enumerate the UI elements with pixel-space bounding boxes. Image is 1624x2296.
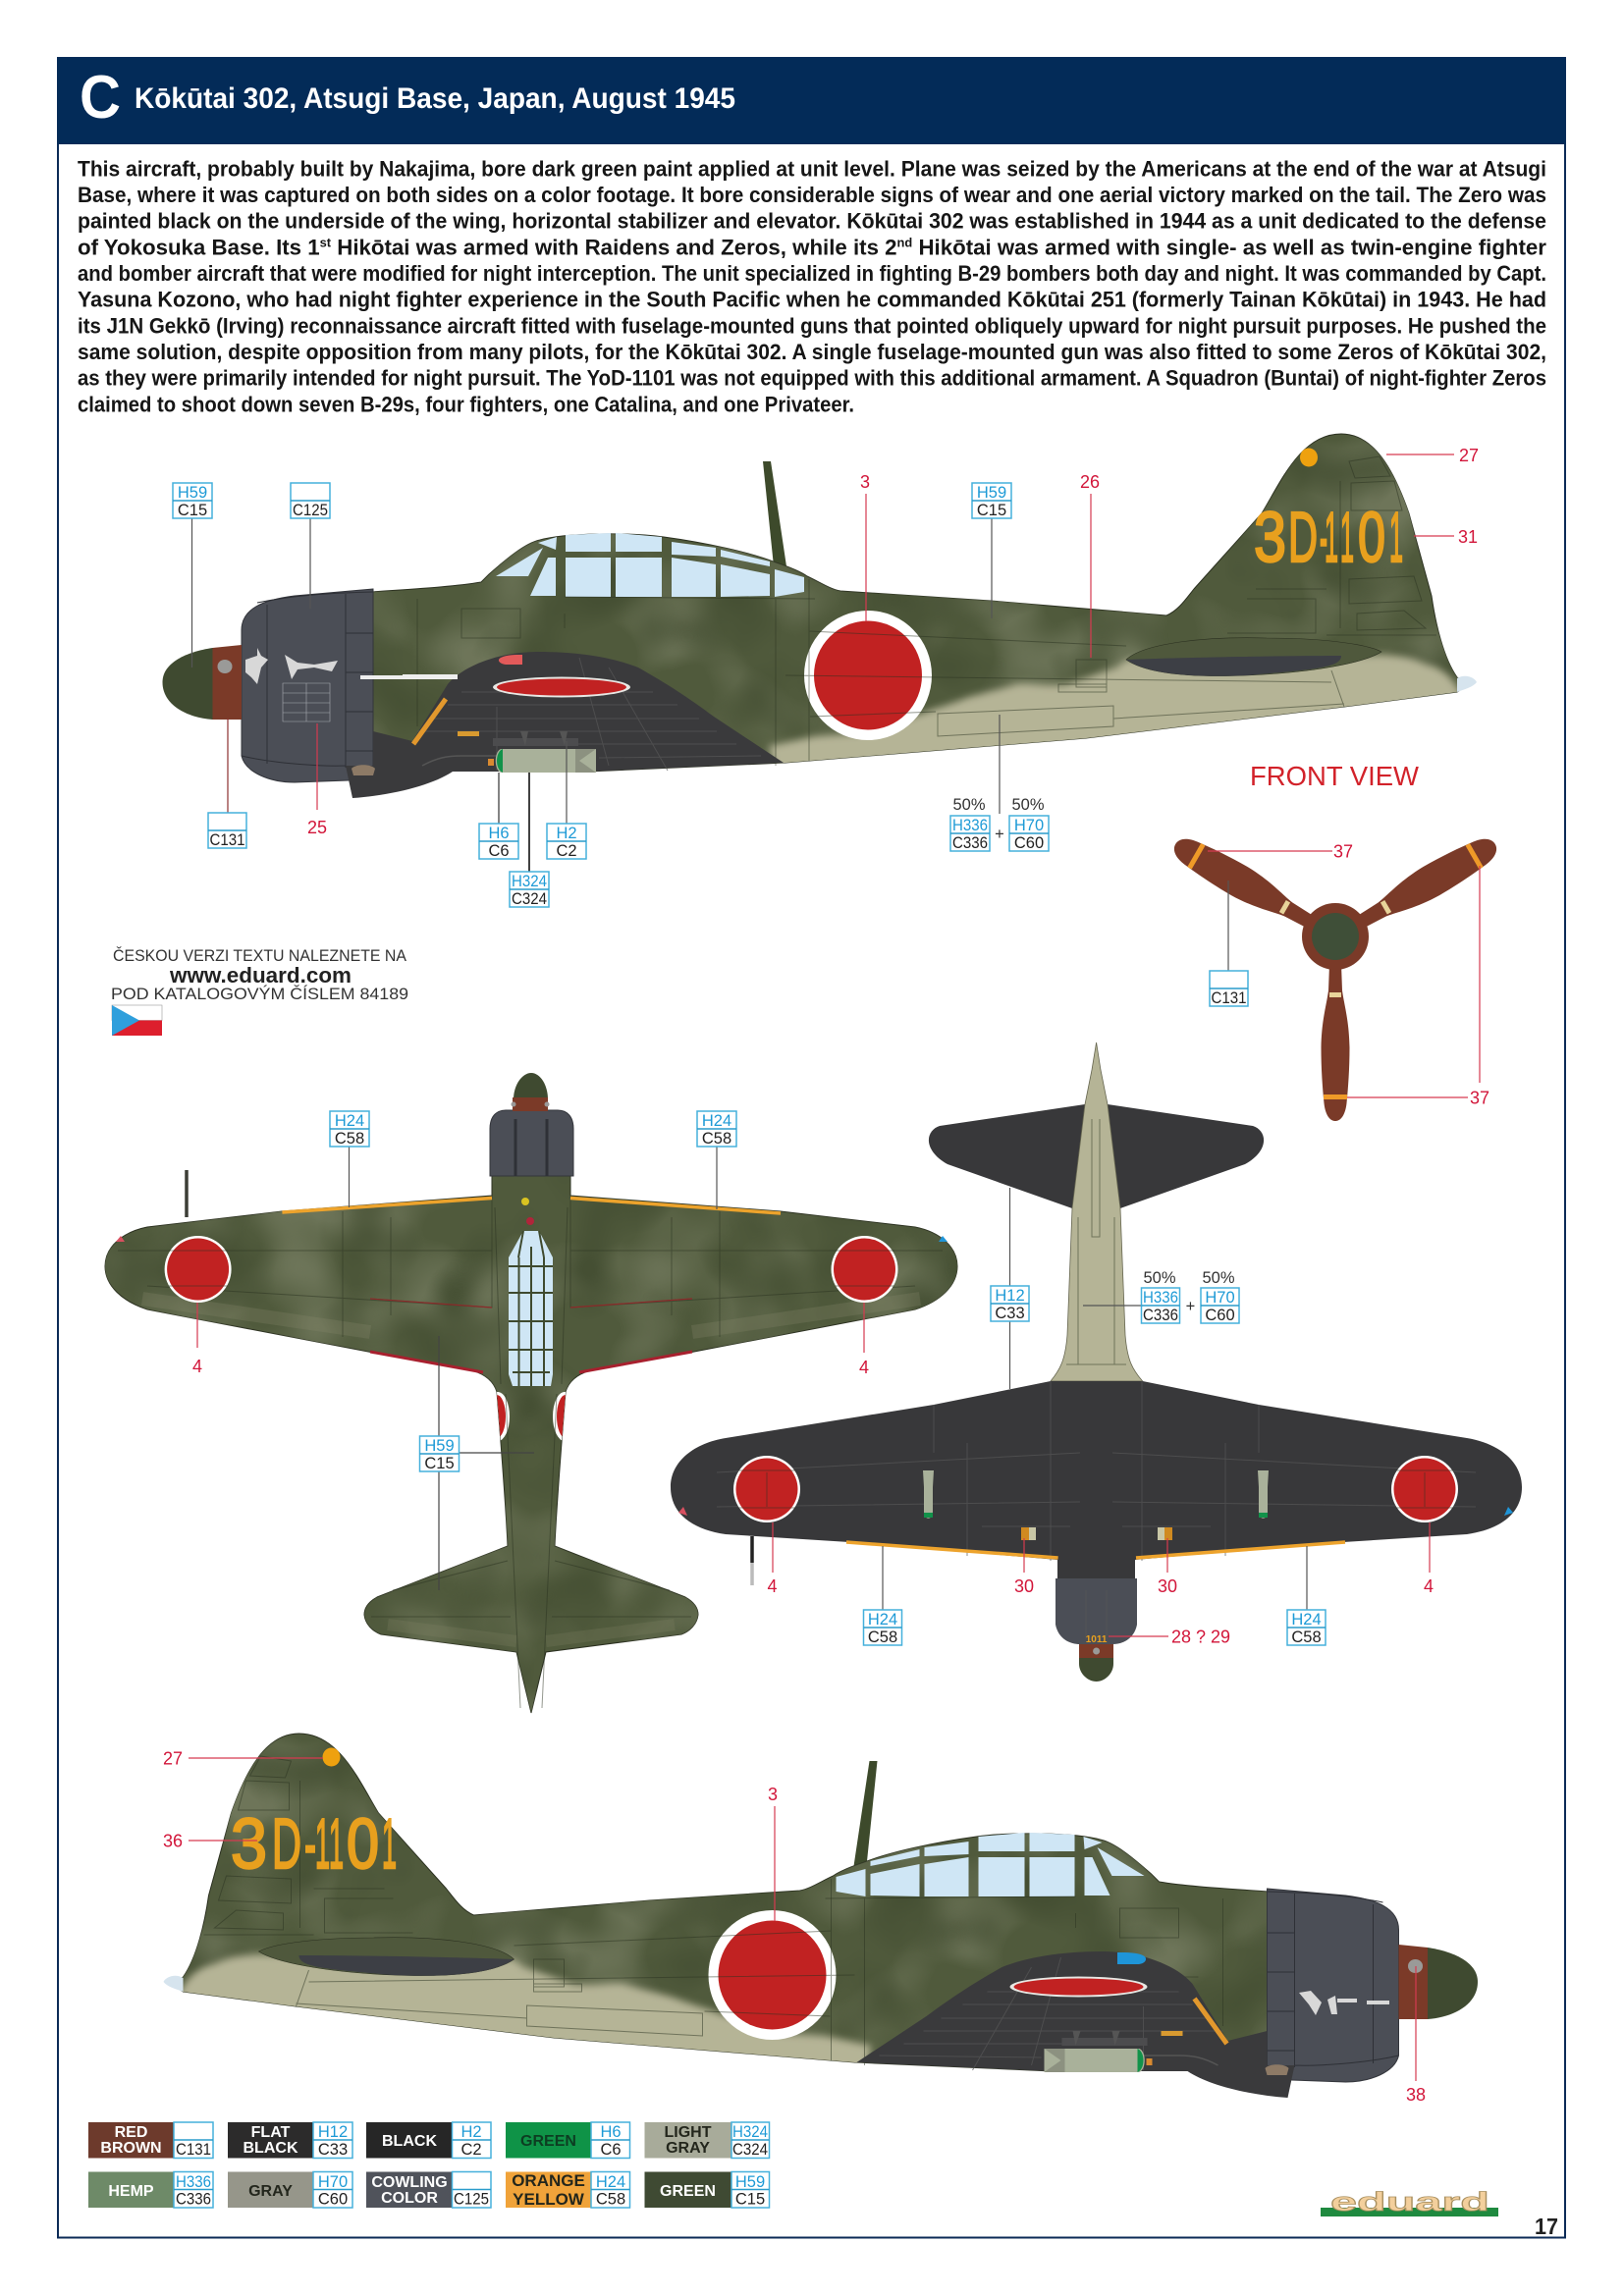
callout 31: 31: [1458, 527, 1478, 547]
label: H12 C33: [991, 1188, 1029, 1389]
tail code: D: [272, 1805, 301, 1884]
label: H24 C58 right wing: H24: [702, 1112, 731, 1130]
tail code: 0: [1358, 499, 1385, 577]
callout 30 right: 30: [1158, 1576, 1177, 1596]
description text block: same solution, despite opposition from many pilots, for the Kōkūtai 302. A single fuselage-mounted gun was also fitted to some Zeros of Kōkūtai 302,: [78, 340, 1546, 364]
label: H59 C15 spinner: H59: [178, 484, 207, 502]
label: 50/50 mix under fuselage: C336: [1143, 1307, 1178, 1324]
callout 36: [163, 1832, 257, 1851]
legend: light gray: [644, 2122, 770, 2159]
aircraft: underside plan view: [671, 1042, 1522, 1682]
legend: green H59: C15: [735, 2191, 765, 2209]
legend: light gray: GRAY: [666, 2140, 710, 2157]
legend: orange yellow: C58: [596, 2191, 625, 2209]
propeller front view: [1167, 830, 1503, 1121]
legend: orange yellow: H24: [596, 2173, 625, 2191]
legend: green H59: [644, 2171, 770, 2209]
tail code: -: [1320, 499, 1327, 577]
legend: gray: GRAY: [248, 2183, 293, 2200]
description text block: painted black on the underside of the wing, horizontal stabilizer and elevator. Kōkūtai 302 was established in 1944 as a unit dedicated to the defense: [78, 209, 1546, 234]
label: 50/50 mix underside: H70: [1014, 817, 1044, 834]
label: 50/50 mix underside: C60: [1014, 834, 1044, 852]
Czech text note: POD KATALOGOVÝM ČÍSLEM 84189: [111, 985, 408, 1003]
legend: cowling color: COWLING: [371, 2174, 448, 2191]
label: C131 propeller: [1210, 881, 1248, 1007]
legend: green H6: GREEN: [520, 2133, 576, 2150]
label: H24 C58 under right: [1287, 1546, 1326, 1646]
tail code: 0: [347, 1805, 379, 1884]
gun barrel: [360, 674, 458, 679]
legend: red brown: [88, 2122, 213, 2159]
legend: light gray: H324: [732, 2123, 768, 2141]
legend: black: H2: [460, 2123, 482, 2141]
legend: flat black: H12: [318, 2123, 348, 2141]
label: H324 C324: H324: [512, 873, 547, 890]
legend: gray: H70: [318, 2173, 348, 2191]
label: C131: C131: [210, 831, 245, 849]
icon: Czech flag: [112, 1005, 162, 1036]
description text block: Yasuna Kozono, who had night fighter experience in the South Pacific when he commanded Kōkūtai 251 (formerly Tainan Kōkūtai) in 1943. He had: [78, 288, 1546, 312]
callout 37 upper: 37: [1333, 842, 1353, 862]
label: H24 C58 left wing: [330, 1111, 369, 1207]
callout 3: 3: [860, 472, 870, 492]
label: 50/50 mix under fuselage: C60: [1205, 1307, 1235, 1324]
label: H24 C58 under left: [864, 1546, 901, 1646]
eduard logo: eduard: [1330, 2187, 1489, 2216]
description text block: Hikōtai was armed with single- as well as twin-engine fighter: [912, 235, 1546, 259]
label: H24 C58 under left: C58: [868, 1629, 897, 1646]
header bar: Kōkūtai 302, Atsugi Base, Japan, August 1945: [135, 82, 735, 115]
eduard logo: [1321, 2187, 1498, 2216]
label: H59 C15 spinner: C15: [178, 502, 207, 519]
label: 50/50 mix underside: [950, 715, 1049, 852]
legend: red brown: RED: [115, 2124, 147, 2141]
header bar: [57, 57, 1566, 144]
label: H2 C2: C2: [556, 842, 577, 860]
label: C131 propeller: C131: [1212, 989, 1247, 1007]
label: H324 C324: [510, 773, 549, 908]
callout 37 lower: 37: [1470, 1088, 1489, 1107]
description text block: st: [320, 235, 332, 249]
legend: green H59: GREEN: [660, 2183, 716, 2200]
legend: cowling color: COLOR: [381, 2190, 438, 2207]
callout 36: 36: [163, 1832, 183, 1851]
callout 26: 26: [1080, 472, 1100, 492]
label: H59 C15 fuselage: [972, 483, 1011, 618]
label: H24 C58 under right: H24: [1291, 1611, 1322, 1629]
tail code: 3: [1254, 499, 1286, 577]
description text block: [78, 157, 1546, 416]
legend: hemp: H336: [176, 2173, 211, 2191]
legend: light gray: C324: [732, 2141, 768, 2159]
tail code: D: [1288, 499, 1318, 577]
legend: orange yellow: ORANGE: [512, 2171, 585, 2190]
label: H59 C15 top view: [420, 1336, 534, 1590]
legend: gray: [228, 2171, 352, 2209]
description text block: of Yokosuka Base. Its 1: [78, 235, 322, 259]
description text block: This aircraft, probably built by Nakajima, bore dark green paint applied at unit level. Plane was seized by the Americans at the end of the war at Atsugi: [78, 157, 1546, 181]
legend: green H59: H59: [735, 2173, 765, 2191]
description text block: nd: [897, 235, 912, 249]
wing navigation lamp: [499, 655, 522, 665]
callout 4 left wing top: [192, 1303, 202, 1376]
label: H12 C33: C33: [995, 1305, 1025, 1322]
legend: hemp: [88, 2171, 213, 2209]
callout 27: [1386, 446, 1479, 465]
callout 4 left wing top: 4: [192, 1357, 202, 1376]
callout 4 right wing top: [859, 1303, 869, 1377]
label: H59 C15 fuselage: C15: [977, 502, 1006, 519]
legend: black: C2: [460, 2141, 482, 2159]
label: H24 C58 under right: C58: [1291, 1629, 1322, 1646]
callout 3: 3: [768, 1785, 778, 1804]
label: H59 C15 spinner: [173, 483, 212, 667]
legend: cowling color: [366, 2171, 491, 2209]
aircraft: right side profile: [163, 422, 1483, 798]
callout 28 ? 29: 28 ? 29: [1171, 1628, 1230, 1647]
label: 50/50 mix under fuselage: 50%: [1143, 1269, 1176, 1287]
label: H24 C58 left wing: C58: [335, 1130, 364, 1148]
cowling code: 1011: [1086, 1634, 1108, 1645]
legend: red brown: BROWN: [100, 2140, 162, 2157]
legend: cowling color: C125: [454, 2191, 489, 2209]
callout 4 right underside: [1424, 1522, 1434, 1596]
legend: hemp: HEMP: [108, 2183, 154, 2200]
legend: green H6: C6: [600, 2141, 622, 2159]
label: 50/50 mix underside: 50%: [1011, 796, 1045, 814]
label: C125 cowling: [291, 483, 330, 609]
legend: flat black: [228, 2122, 352, 2159]
callout 30 right: [1158, 1538, 1177, 1596]
label: H6 C6: C6: [488, 842, 510, 860]
tail code: 1: [315, 1805, 330, 1884]
legend: black: [366, 2122, 491, 2159]
tail code: -: [304, 1805, 316, 1884]
exhaust staining on cowling: [245, 648, 338, 684]
legend: light gray: LIGHT: [664, 2124, 712, 2141]
tail code: 1: [329, 1805, 344, 1884]
label: H12 C33: H12: [995, 1287, 1025, 1305]
tail code: 1: [1340, 499, 1354, 577]
label: H6 C6: H6: [488, 825, 510, 842]
page number: 17: [1535, 2214, 1558, 2239]
cowling data placard: [283, 683, 330, 721]
callout 4 left underside: [767, 1522, 778, 1596]
label: H2 C2: [547, 741, 586, 860]
callout 25: [307, 723, 327, 837]
callout 31: [1414, 527, 1478, 547]
label: H24 C58 right wing: C58: [702, 1130, 731, 1148]
legend: green H6: [506, 2122, 630, 2159]
legend: gray: C60: [318, 2191, 348, 2209]
aircraft: right side profile: 1: [1389, 499, 1403, 577]
legend: flat black: C33: [318, 2141, 348, 2159]
label: 50/50 mix underside: 50%: [952, 796, 986, 814]
aircraft: left side profile: [157, 1722, 1478, 2098]
heading: front view: FRONT VIEW: [1250, 761, 1420, 791]
label: H24 C58 left wing: H24: [335, 1112, 364, 1130]
wing navigation lamp: [1117, 1952, 1146, 1964]
label: 50/50 mix under fuselage: +: [1186, 1298, 1195, 1315]
Czech text note: www.eduard.com: [169, 963, 352, 988]
callout 37 lower: [1347, 866, 1489, 1107]
callout 30 left: [1014, 1538, 1034, 1596]
callout 30 left: 30: [1014, 1576, 1034, 1596]
tail code: [1254, 499, 1403, 577]
label: 50/50 mix under fuselage: 50%: [1202, 1269, 1235, 1287]
callout 28 ? 29: [1109, 1628, 1230, 1647]
callout 27: 27: [1459, 446, 1479, 465]
label: 50/50 mix under fuselage: H70: [1205, 1289, 1235, 1307]
legend: black: BLACK: [382, 2133, 437, 2150]
label: C131: [208, 719, 246, 849]
exhaust staining on cowling: [1299, 1991, 1389, 2015]
callout 4 right underside: 4: [1424, 1576, 1434, 1596]
label: H59 C15 fuselage: H59: [977, 484, 1006, 502]
label: H324 C324: C324: [512, 890, 547, 908]
callout 25: 25: [307, 818, 327, 837]
callout 38: 38: [1406, 2085, 1426, 2105]
label: H59 C15 top view: H59: [424, 1437, 455, 1455]
aircraft: top plan view: [98, 1070, 962, 1718]
label: 50/50 mix underside: +: [995, 826, 1004, 843]
label: C125 cowling: C125: [293, 502, 328, 519]
label: H24 C58 under left: H24: [868, 1611, 897, 1629]
label: H59 C15 top view: C15: [424, 1455, 455, 1472]
aircraft: left side profile: 1: [382, 1805, 397, 1884]
tail code: [231, 1805, 397, 1884]
header bar: C: [80, 64, 121, 132]
legend: hemp: C336: [176, 2191, 211, 2209]
legend: green H6: H6: [600, 2123, 622, 2141]
Czech text note: [111, 946, 408, 1003]
legend: flat black: FLAT: [251, 2124, 291, 2141]
tail code: 1: [1325, 499, 1338, 577]
callout 4 left underside: 4: [767, 1576, 778, 1596]
legend: orange yellow: [506, 2171, 630, 2209]
legend: flat black: BLACK: [244, 2140, 298, 2157]
Czech text note: ČESKOU VERZI TEXTU NALEZNETE NA: [113, 946, 407, 965]
tail code: 3: [231, 1805, 267, 1884]
description text block: claimed to shoot down seven B-29s, four fighters, one Catalina, and one Privateer.: [78, 392, 854, 416]
legend: red brown: C131: [176, 2141, 211, 2159]
label: H24 C58 right wing: [697, 1111, 736, 1209]
label: 50/50 mix underside: H336: [952, 817, 988, 834]
callout 4 right wing top: 4: [859, 1358, 869, 1377]
label: 50/50 mix under fuselage: H336: [1143, 1289, 1178, 1307]
label: H2 C2: H2: [556, 825, 577, 842]
label: 50/50 mix underside: C336: [952, 834, 988, 852]
label: 50/50 mix under fuselage: [1083, 1269, 1239, 1324]
callout 27: 27: [163, 1749, 183, 1769]
description text block: Hikōtai was armed with Raidens and Zeros, while its 2: [331, 235, 897, 259]
callout 3: [768, 1785, 778, 1921]
legend: orange yellow: YELLOW: [513, 2190, 585, 2209]
label: H6 C6: [479, 773, 518, 860]
